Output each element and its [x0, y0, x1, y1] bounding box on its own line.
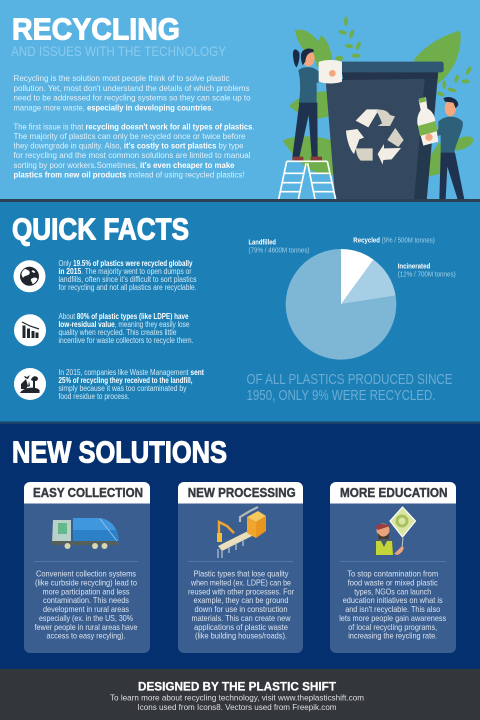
icon: recycling symbol: [346, 109, 404, 165]
text block: fact one: [58, 259, 197, 292]
text block: fact three: simply because it was too contaminated by: [58, 384, 187, 393]
subtitle: AND ISSUES WITH THE TECHNOLOGY: [11, 43, 227, 59]
footer credits: Icons used from Icons8. Vectors used from Freepik.com: [138, 702, 337, 712]
text block: easy collection: development in rural areas: [43, 604, 129, 614]
icon: declining chart: [14, 314, 46, 346]
text block: more education: lets more people gain awareness: [339, 613, 446, 623]
text block: new processing: down for use in construction: [194, 604, 288, 614]
footer credits: To learn more about recycling technology, visit www.theplasticshift.com: [110, 692, 364, 702]
legend: landfilled: Landfilled: [248, 238, 276, 246]
footer credits: [110, 692, 364, 712]
text block: new processing: applications of plastic waste: [194, 622, 288, 632]
text block: easy collection: Convenient collection systems: [36, 568, 136, 578]
text block: fact three: [58, 368, 204, 401]
text block: fact one: in 2015. The majority went to open dumps or: [58, 267, 192, 276]
text block: intro paragraph: Recycling is the solution most people think of to solve plastic: [14, 73, 230, 83]
text block: new processing: Plastic types that lose quality: [194, 568, 289, 578]
ladder: [279, 161, 336, 199]
text block: easy collection: (like curbside recycling) lead to: [35, 577, 137, 587]
legend: incinerated: (12% / 700M tonnes): [398, 270, 456, 278]
legend: incinerated: Incinerated: [398, 262, 430, 270]
text block: fact one: Only 19.5% of plastics were recycled globally: [58, 259, 193, 268]
legend: recycled: Recycled (9% / 500M tonnes): [353, 236, 435, 244]
text block: fact two: low-residual value, meaning they easily lose: [58, 320, 190, 329]
icon: landfill: [14, 368, 46, 400]
text block: intro paragraph: manage more waste, especially in developing countries.: [14, 102, 213, 112]
text block: fact one: landfills, often since it's difficult to sort plastics: [58, 275, 197, 284]
text block: more education: To stop contamination from: [347, 568, 438, 578]
text block: more education: education initiatives on what is: [343, 595, 443, 605]
text block: easy collection: especially (ex. in the US, 30%: [39, 613, 134, 623]
card: easy collection: [24, 482, 150, 653]
text block: first issue paragraph: for recycling and the most common solutions are limited to manual: [14, 150, 251, 160]
text block: easy collection: more participation and less: [42, 586, 130, 596]
person: man with bottle: [417, 97, 464, 199]
bin: [326, 62, 444, 200]
text block: easy collection: fewer people in rural areas have: [34, 622, 138, 632]
card heading: EASY COLLECTION: [33, 486, 143, 500]
pie chart: plastic fate: [286, 249, 396, 360]
text block: intro paragraph: [14, 73, 251, 112]
text block: fact three: food residue to process.: [58, 392, 130, 401]
legend: landfilled: (79% / 4600M tonnes): [248, 246, 310, 254]
text block: new processing: reused with other processes. For: [188, 586, 294, 596]
legend: landfilled: [248, 238, 310, 254]
text block: first issue paragraph: sorting by poor workers.Sometimes, it's even cheaper to make: [14, 160, 235, 170]
text block: new processing: [188, 568, 294, 641]
text block: more education: and isn't recyclable. This also: [345, 604, 441, 614]
icon: worker with sign: [374, 507, 416, 555]
text block: fact three: In 2015, companies like Waste Management sent: [58, 368, 204, 377]
card: more education: [330, 482, 456, 653]
panel: footer: [0, 669, 480, 720]
text block: fact two: quality when recycled. This creates little: [58, 328, 177, 337]
icon: globe: [14, 260, 46, 292]
text block: fact two: incentive for waste collectors to recycle them.: [58, 336, 194, 345]
panel: new solutions: [0, 424, 480, 669]
text block: first issue paragraph: [14, 122, 254, 180]
text block: more education: food waste or mixed plastic: [348, 577, 438, 587]
text block: first issue paragraph: plastics from new oil products instead of using recycled plastics!: [14, 170, 244, 180]
text block: first issue paragraph: The first issue is that recycling doesn't work for all types of plastics.: [14, 122, 254, 132]
callout: only 9 percent recycled: [246, 371, 452, 404]
text block: intro paragraph: pollution. Yet, most don't understand the details of which problems: [14, 83, 250, 93]
text block: fact one: for recycling and not all plastics are recyclable.: [58, 283, 196, 292]
illustration: people recycling at a bin: [279, 17, 474, 200]
heading: new solutions: NEW SOLUTIONS: [12, 434, 227, 470]
card: new processing: [178, 482, 303, 653]
title: RECYCLING: [12, 12, 180, 46]
legend: incinerated: [398, 262, 456, 278]
text block: more education: [339, 568, 446, 641]
text block: fact three: 25% of recycling they received to the landfill,: [58, 376, 192, 385]
card heading: MORE EDUCATION: [340, 486, 448, 500]
text block: new processing: (like building houses/roads).: [195, 631, 287, 641]
text block: easy collection: contamination. This needs: [43, 595, 129, 605]
text block: easy collection: access to easy recyling).: [46, 631, 126, 641]
text block: intro paragraph: need to be addressed for recycling systems so they can scale up to: [14, 92, 251, 102]
panel: quick facts: [0, 199, 480, 424]
card heading: NEW PROCESSING: [188, 486, 296, 500]
text block: more education: increasing the reycling rate.: [348, 631, 437, 641]
text block: easy collection: [34, 568, 138, 641]
text block: new processing: example, they can be ground: [194, 595, 289, 605]
text block: new processing: materials. This can create new: [192, 613, 291, 623]
text block: more education: of local recycling programs,: [348, 622, 437, 632]
text block: first issue paragraph: they downgrade in quality. Also, it's costly to sort plastics by type: [14, 140, 244, 150]
leaves: [283, 17, 474, 177]
icon: factory robots: [217, 507, 266, 558]
person: woman on ladder: [292, 49, 342, 160]
heading: quick facts: QUICK FACTS: [12, 212, 189, 246]
text block: first issue paragraph: The majority of plastics can only be recycled once or twice before: [14, 131, 246, 141]
text block: fact two: [58, 312, 194, 345]
footer heading: DESIGNED BY THE PLASTIC SHIFT: [138, 681, 336, 693]
text block: more education: types, NGOs can launch: [354, 586, 432, 596]
text block: new processing: when melted (ex. LDPE) can be: [190, 577, 291, 587]
panel: intro: [0, 0, 480, 200]
icon: garbage truck: [52, 518, 119, 549]
text block: fact two: About 80% of plastic types (like LDPE) have: [58, 312, 189, 321]
